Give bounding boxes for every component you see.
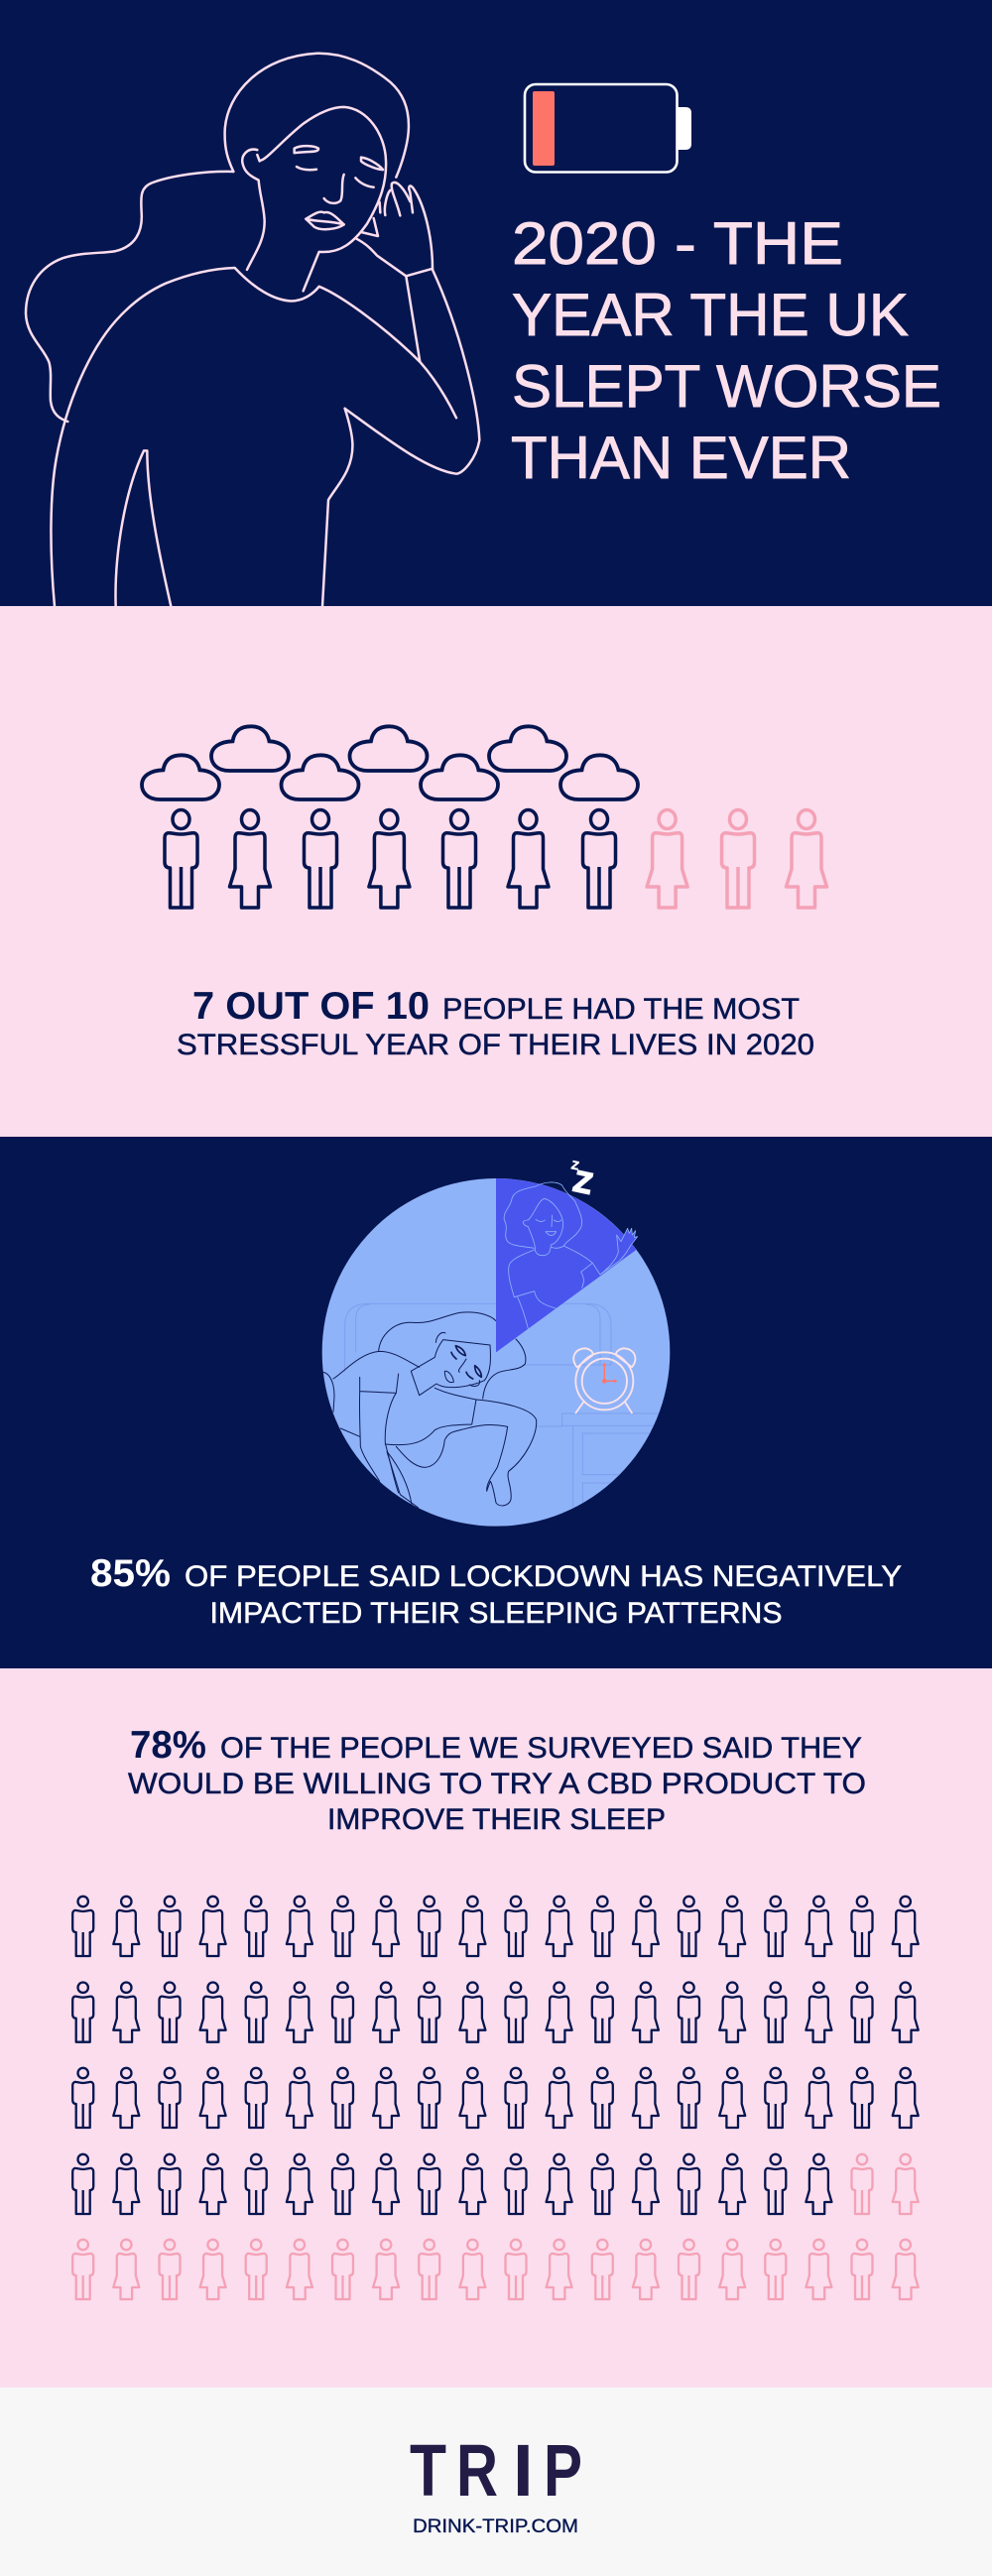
panel: CBD statistic: [0, 1668, 992, 2388]
logo: TRIP: I: [513, 2429, 534, 2512]
pictogram: 78 of 100 people: [72, 1897, 919, 2299]
stat text: 85%: OF PEOPLE SAID LOCKDOWN HAS NEGATIVELY: [185, 1560, 902, 1593]
logo: TRIP: T: [410, 2429, 446, 2512]
pie wedge: 15% slept well: [496, 1178, 636, 1352]
panel: stress statistic: [0, 606, 992, 1137]
icon: sleep Z letters: Z: [570, 1158, 580, 1172]
logo: TRIP: R: [456, 2429, 498, 2512]
stat text: 85%: [90, 1552, 902, 1630]
illustration: tired woman holding her head: [26, 54, 479, 606]
title: 2020 - THE: [512, 210, 843, 277]
illustration: rested woman waving: [504, 1182, 638, 1328]
stat text: 78%: 78%: [130, 1724, 206, 1767]
icon: low battery: [525, 84, 691, 173]
pictogram: remaining 3 of 10 people: [647, 809, 827, 908]
icon: alarm clock: [573, 1348, 635, 1413]
pictogram: 7 of 10 people stressed: [165, 809, 615, 908]
panel: lockdown sleep statistic: [0, 1137, 992, 1668]
title: [511, 210, 941, 491]
website address: DRINK-TRIP.COM: [413, 2516, 578, 2537]
stat text: 7 out of 10: [177, 985, 814, 1061]
title: YEAR THE UK: [512, 282, 909, 348]
illustration: bed and bedside table: [345, 1303, 665, 1515]
stat text: 78%: WOULD BE WILLING TO TRY A CBD PRODUCT TO: [128, 1768, 866, 1800]
stat text: 7 out of 10: PEOPLE HAD THE MOST: [442, 993, 800, 1026]
title: SLEPT WORSE: [512, 353, 941, 420]
illustration: tired woman: [323, 1312, 537, 1508]
title: THAN EVER: [511, 425, 851, 491]
logo: TRIP: P: [544, 2429, 582, 2512]
stat text: 7 out of 10: 7 OUT OF 10: [192, 985, 430, 1028]
logo: TRIP: [410, 2429, 582, 2512]
pie chart: 85% negatively impacted: [322, 1158, 670, 1527]
stat text: 78%: OF THE PEOPLE WE SURVEYED SAID THEY: [220, 1732, 862, 1765]
icon: sleep Z letters: Z: [570, 1165, 595, 1201]
icon row: stress clouds: [142, 726, 638, 799]
stat text: 78%: IMPROVE THEIR SLEEP: [327, 1803, 666, 1836]
panel: footer: [0, 2388, 992, 2576]
stat text: 78%: [128, 1724, 866, 1836]
stat text: 85%: IMPACTED THEIR SLEEPING PATTERNS: [210, 1597, 782, 1630]
stat text: 7 out of 10: STRESSFUL YEAR OF THEIR LIVES IN 2020: [177, 1029, 814, 1061]
panel: hero: [0, 0, 992, 606]
stat text: 85%: 85%: [90, 1552, 171, 1595]
